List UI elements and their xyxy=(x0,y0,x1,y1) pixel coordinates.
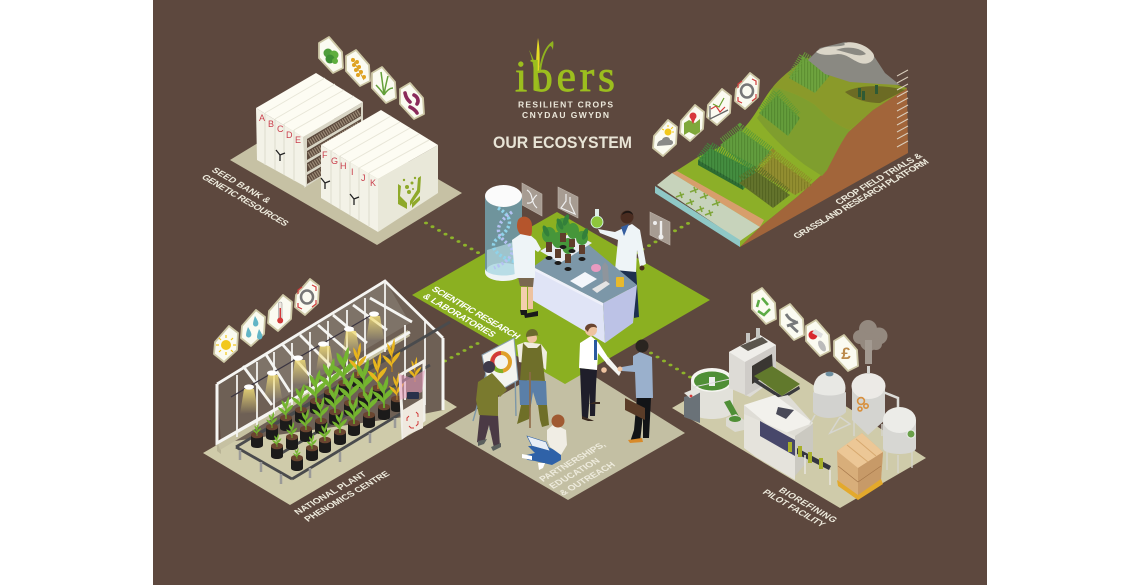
panel: biorefining pilot facility xyxy=(672,288,926,529)
label: & OUTREACH xyxy=(557,460,617,497)
coastal plants xyxy=(676,187,720,216)
plate xyxy=(672,354,926,508)
panel: crop field trials xyxy=(653,42,931,247)
icon: hands holding seeds xyxy=(398,176,421,209)
microscope xyxy=(592,262,609,292)
label: PHENOMICS CENTRE xyxy=(302,469,392,523)
cabinet A-E xyxy=(256,73,363,188)
roof bars xyxy=(217,281,443,405)
control panel xyxy=(684,388,701,423)
sitting girl xyxy=(522,414,567,470)
plate xyxy=(203,355,457,505)
label: SEED BANK & xyxy=(209,166,274,205)
label xyxy=(537,440,617,497)
rock xyxy=(808,42,900,85)
hillside xyxy=(673,58,907,247)
pallet of boxes xyxy=(837,433,883,500)
panel: seed bank xyxy=(199,37,462,245)
sign: flask xyxy=(558,187,578,218)
man with lanyard xyxy=(579,324,621,421)
label: PILOT FACILITY xyxy=(760,488,828,529)
icon hex: pound xyxy=(834,335,858,371)
crop plot 6 xyxy=(789,55,832,93)
plate: scientific research xyxy=(412,212,710,384)
icon hex: recycle xyxy=(752,288,776,324)
icon hex: line chart xyxy=(707,89,731,125)
icon hex: cycle scan xyxy=(295,279,319,315)
shelf letters: H xyxy=(340,161,346,171)
icon: grass sprout xyxy=(529,38,553,91)
shadow zone xyxy=(845,86,905,103)
lab bench xyxy=(532,232,637,343)
shelf letters: I xyxy=(351,167,354,177)
man at easel xyxy=(476,361,507,451)
phenotyping scanner xyxy=(399,361,425,437)
icon hex: weather xyxy=(653,120,677,156)
shelf letters xyxy=(322,150,376,188)
label: SCIENTIFIC RESEARCH xyxy=(429,285,523,341)
shelf letters: G xyxy=(331,156,338,166)
seedlings xyxy=(541,214,589,271)
shelf letters: C xyxy=(277,124,284,134)
paper xyxy=(570,272,597,288)
dna cylinder xyxy=(485,185,522,281)
crop plot 4 xyxy=(758,153,812,195)
dotted connector: seed bank to laboratories xyxy=(424,222,480,254)
shelf letters: A xyxy=(259,113,265,123)
trees xyxy=(858,85,878,100)
water front xyxy=(655,186,740,247)
heading: OUR ECOSYSTEM xyxy=(493,133,632,152)
label: CROP FIELD TRIALS & xyxy=(833,151,925,206)
strapline welsh: CNYDAU GWYDN xyxy=(522,110,609,120)
shelf letters: F xyxy=(322,150,328,160)
icon hex: sun xyxy=(214,326,238,362)
lamp rail xyxy=(231,313,375,397)
shelf letters: K xyxy=(370,178,376,188)
beach strip xyxy=(672,171,764,227)
man with briefcase xyxy=(618,340,653,443)
icon hex: molecule xyxy=(780,304,804,340)
plate xyxy=(230,108,462,245)
tank two xyxy=(852,366,898,436)
icon hex: thermometer xyxy=(268,295,292,331)
round vat xyxy=(691,368,733,419)
icon hex: map pin xyxy=(680,105,704,141)
scientist man xyxy=(591,209,646,318)
panel: national plant phenomics centre xyxy=(203,279,457,523)
crop plot 5 xyxy=(759,92,800,136)
crop plot 2 xyxy=(720,127,772,172)
handle xyxy=(276,150,285,161)
green flask xyxy=(591,209,603,228)
icon hex: wheat xyxy=(346,50,370,86)
plants xyxy=(251,338,421,471)
bottling line xyxy=(744,395,831,485)
crop plot 1 xyxy=(698,145,757,190)
shelf letters xyxy=(259,113,301,145)
conveyor dryer xyxy=(729,328,800,400)
farmer xyxy=(517,329,549,428)
depth scale xyxy=(897,70,908,147)
chute xyxy=(724,400,744,432)
shore xyxy=(657,173,760,241)
mid hill zone xyxy=(757,87,850,176)
pink flask xyxy=(591,264,601,272)
ibers wordmark: ibers xyxy=(515,52,615,101)
cabinet F-K xyxy=(321,110,438,232)
plate: partnerships xyxy=(445,358,685,500)
shelf letters: E xyxy=(295,135,301,145)
icon hex: capsule xyxy=(806,320,830,356)
beaker xyxy=(616,277,624,287)
icon hex: water drops xyxy=(241,310,265,346)
panel: partnerships, education and outreach xyxy=(473,324,653,497)
sign: dna xyxy=(522,183,542,216)
dotted connector: biorefining to laboratories xyxy=(649,352,692,378)
icon hex: clover xyxy=(319,37,343,73)
lamps xyxy=(240,311,384,414)
briefcase xyxy=(625,398,645,420)
title block: logo xyxy=(515,38,615,120)
icon hex: cycle scan xyxy=(735,73,759,109)
soil side xyxy=(740,88,908,247)
label: EDUCATION xyxy=(547,456,602,490)
posts xyxy=(237,283,425,437)
label: PARTNERSHIPS, xyxy=(537,440,608,483)
icon hex: grass xyxy=(372,67,396,103)
steam xyxy=(853,320,888,364)
label: GENETIC RESOURCES xyxy=(199,173,291,228)
scientist woman xyxy=(512,217,541,318)
icon hex: beans xyxy=(400,83,424,119)
dotted connector: field trials to laboratories xyxy=(634,222,690,254)
bench legs xyxy=(240,418,395,484)
shelf letters: J xyxy=(361,173,366,183)
shelf letters: D xyxy=(286,130,293,140)
strapline: RESILIENT CROPS xyxy=(518,100,613,110)
tank one xyxy=(810,372,850,433)
crop plot 3 xyxy=(739,168,790,208)
dotted connector: phenomics to laboratories xyxy=(430,342,480,369)
label: BIOREFINING xyxy=(776,486,839,524)
handles xyxy=(321,178,359,205)
tank three xyxy=(883,407,916,473)
bench rails xyxy=(236,322,450,479)
icon hex: pound: £ xyxy=(841,344,851,363)
shelf letters: B xyxy=(268,119,274,129)
upper hill zone xyxy=(773,58,907,130)
sign: thermometer xyxy=(650,212,670,245)
label: & LABORATORIES xyxy=(420,292,498,339)
label: NATIONAL PLANT xyxy=(292,470,369,516)
panel: scientific research and laboratories xyxy=(420,183,670,343)
label: GRASSLAND RESEARCH PLATFORM xyxy=(791,157,931,240)
glass house xyxy=(217,280,443,454)
easel xyxy=(473,338,518,430)
